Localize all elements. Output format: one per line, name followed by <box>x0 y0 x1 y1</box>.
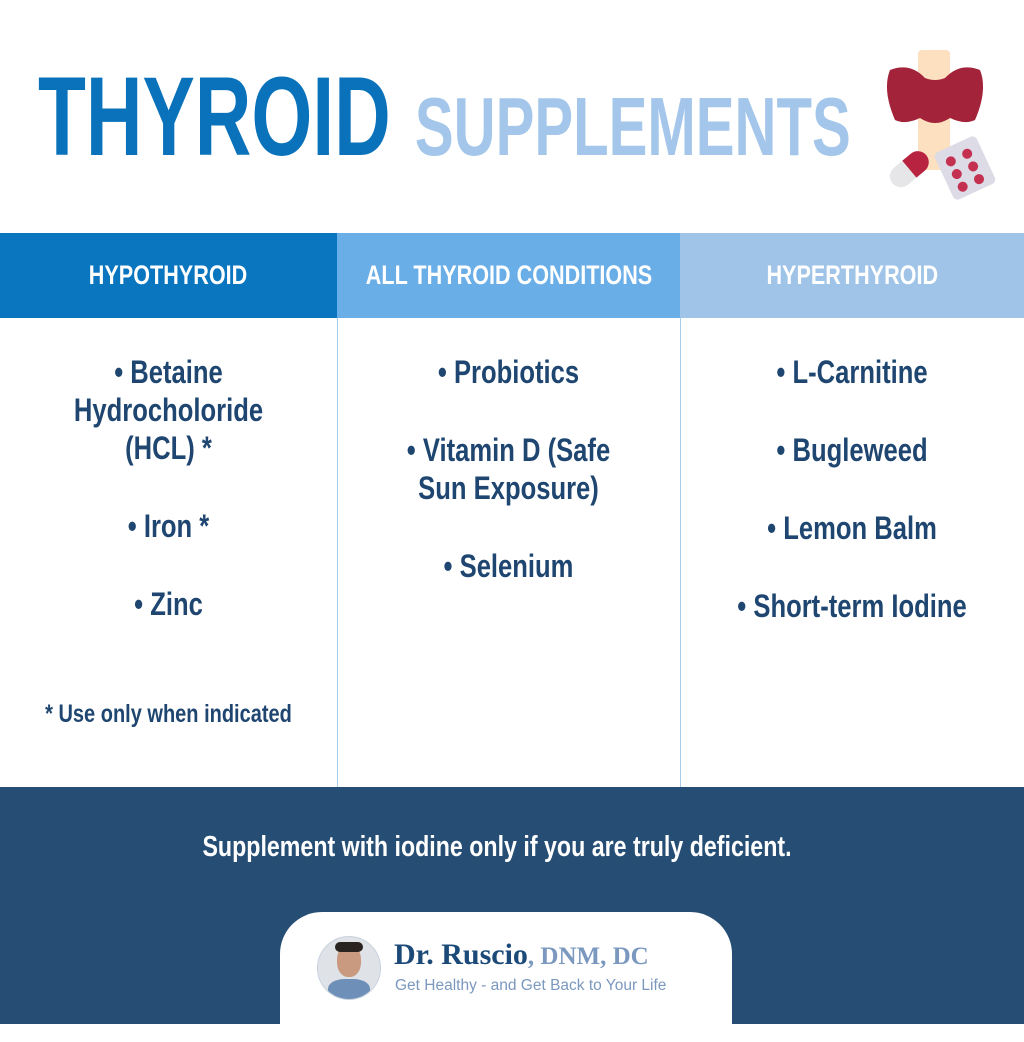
column: hyperthyroid list: • Bugleweed <box>776 432 928 468</box>
header: hyperthyroid: HYPERTHYROID <box>766 260 938 290</box>
column: hypothyroid list: • Iron * <box>128 508 209 544</box>
column: hypothyroid list: * Use only when indicated <box>45 700 292 728</box>
icon: thyroid with pills <box>886 50 996 200</box>
column dividers <box>337 318 338 787</box>
column: hypothyroid list: • Zinc <box>134 586 203 622</box>
brand name: Dr. Ruscio, DNM, DC <box>394 938 649 971</box>
column: hypothyroid list: Hydrocholoride <box>74 392 263 428</box>
column: all conditions list: • Probiotics <box>438 354 579 390</box>
title: THYROID SUPPLEMENTS <box>38 54 851 179</box>
column: all conditions list: • Vitamin D (Safe <box>407 432 610 468</box>
header: hypothyroid <box>0 233 337 318</box>
footer band <box>0 787 1024 1024</box>
column: hypothyroid list <box>45 354 292 728</box>
footer note: Supplement with iodine only if you are truly deficient. <box>202 831 792 863</box>
header: all thyroid conditions <box>337 233 680 318</box>
column: all conditions list: • Selenium <box>444 548 573 584</box>
avatar <box>317 936 381 1000</box>
column: hypothyroid list: (HCL) * <box>125 430 212 466</box>
column: all conditions list <box>407 354 610 584</box>
column: all conditions list: Sun Exposure) <box>418 470 599 506</box>
tagline: Get Healthy - and Get Back to Your Life <box>395 977 666 994</box>
column: hyperthyroid list: • Short-term Iodine <box>737 588 967 624</box>
logo card <box>280 912 732 1042</box>
column: hyperthyroid list: • Lemon Balm <box>767 510 937 546</box>
column: hypothyroid list: • Betaine <box>114 354 223 390</box>
header: all thyroid conditions: ALL THYROID CONDITIONS <box>365 260 652 290</box>
column: hyperthyroid list <box>737 354 967 624</box>
header: hypothyroid: HYPOTHYROID <box>89 260 248 290</box>
header: hyperthyroid <box>680 233 1024 318</box>
column: hyperthyroid list: • L-Carnitine <box>776 354 928 390</box>
